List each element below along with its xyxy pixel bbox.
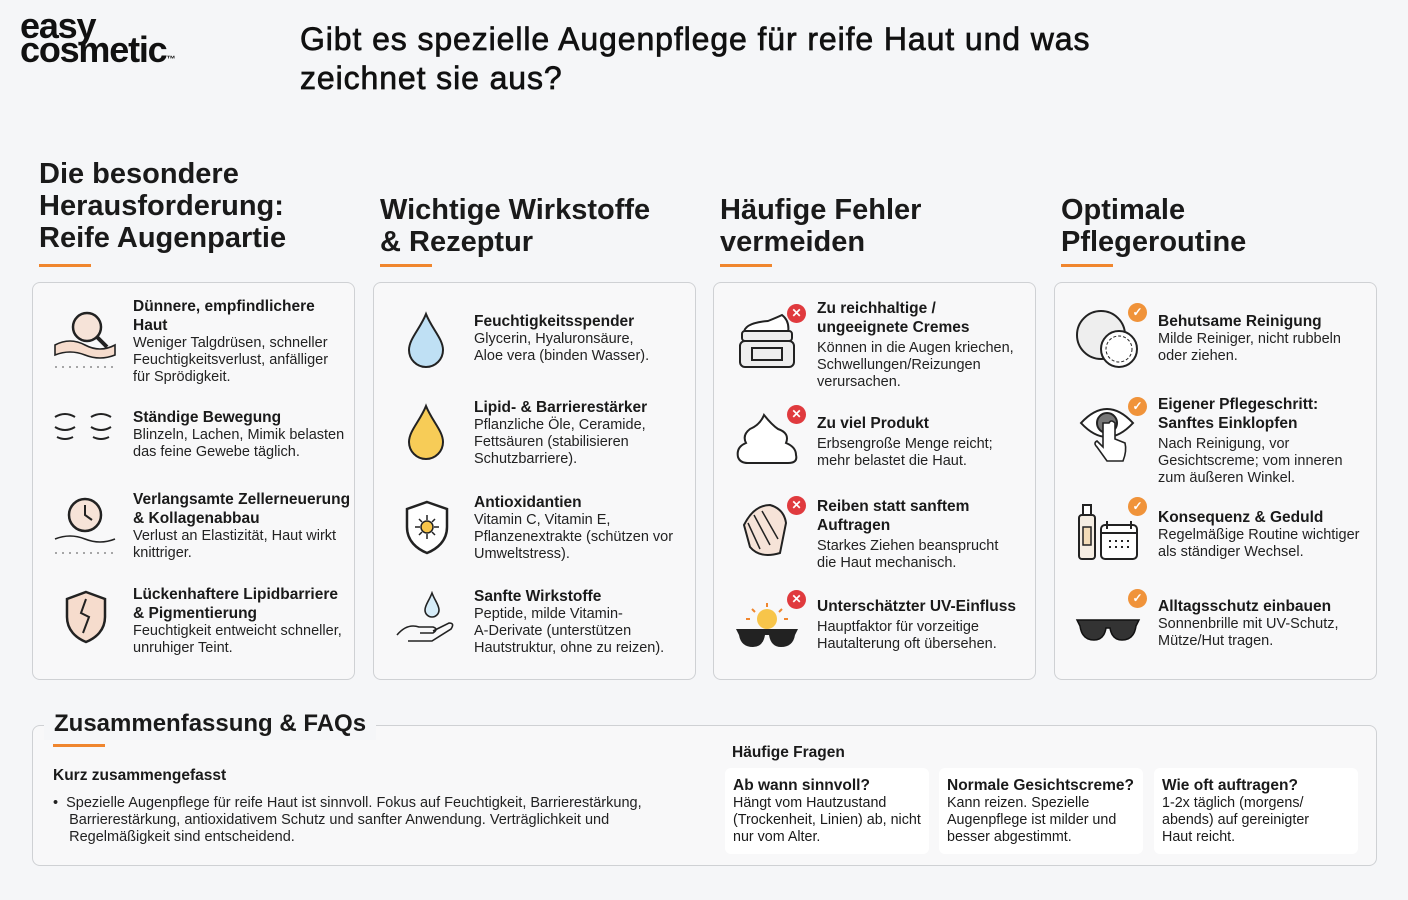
panel: challenge <box>32 282 355 680</box>
faq card: besser abgestimmt. <box>947 829 1072 845</box>
faq card: Wie oft auftragen? <box>1162 777 1298 794</box>
item: oder ziehen. <box>1158 348 1238 364</box>
item: Gesichtscreme; vom inneren <box>1158 453 1343 469</box>
icon: clock skin <box>54 498 116 554</box>
logo: cosmetic™ <box>20 29 175 70</box>
item <box>817 415 993 469</box>
item: Antioxidantien <box>474 494 582 511</box>
heading col3 <box>720 194 921 258</box>
item: Feuchtigkeit entweicht schneller, <box>133 623 342 639</box>
faq card <box>939 768 1143 854</box>
faq card: Augenpflege ist milder und <box>947 812 1116 828</box>
faq card: Haut reicht. <box>1162 829 1235 845</box>
heading col1: Reife Augenpartie <box>39 222 286 254</box>
item: Reiben statt sanftem <box>817 498 969 515</box>
item: Behutsame Reinigung <box>1158 313 1322 330</box>
item <box>1158 313 1341 364</box>
item: Hautalterung oft übersehen. <box>817 636 997 652</box>
item: Verlangsamte Zellerneuerung <box>133 491 350 508</box>
heading col3: vermeiden <box>720 226 865 258</box>
item: zum äußeren Winkel. <box>1158 470 1295 486</box>
panel: routine: ✓ <box>1132 399 1143 413</box>
faq card: Hängt vom Hautzustand <box>733 795 886 811</box>
icon: eyes <box>54 413 112 440</box>
logo <box>20 5 175 70</box>
item: Konsequenz & Geduld <box>1158 509 1323 526</box>
heading col4: Pflegeroutine <box>1061 226 1246 258</box>
item: Sonnenbrille mit UV-Schutz, <box>1158 616 1339 632</box>
item: Haut <box>133 317 167 334</box>
heading col2: & Rezeptur <box>380 226 533 258</box>
heading col4 <box>1061 194 1246 258</box>
item: Schutzbarriere). <box>474 451 577 467</box>
item: verursachen. <box>817 374 901 390</box>
panel: mistakes: ✕ <box>791 498 802 512</box>
summary text <box>53 767 642 845</box>
item: Eigener Pflegeschritt: <box>1158 396 1318 413</box>
faq card <box>1154 768 1358 854</box>
item: Feuchtigkeitsverlust, anfälliger <box>133 352 328 368</box>
title: Gibt es spezielle Augenpflege für reife Haut und was <box>300 21 1090 57</box>
item: Lückenhaftere Lipidbarriere <box>133 586 338 603</box>
item: Milde Reiniger, nicht rubbeln <box>1158 331 1341 347</box>
item: Weniger Talgdrüsen, schneller <box>133 335 328 351</box>
item <box>817 300 1014 390</box>
heading col4: Optimale <box>1061 194 1185 226</box>
item: Blinzeln, Lachen, Mimik belasten <box>133 427 344 443</box>
item <box>474 313 649 364</box>
logo: easy <box>20 5 95 46</box>
item: Dünnere, empfindlichere <box>133 298 315 315</box>
panel: mistakes <box>713 282 1036 680</box>
item: Zu reichhaltige / <box>817 300 936 317</box>
panel: mistakes: ✕ <box>791 407 802 421</box>
heading col2 <box>380 194 650 258</box>
item: Sanftes Einklopfen <box>1158 415 1298 432</box>
icon: shield <box>406 500 448 554</box>
item: A-Derivate (unterstützen <box>474 623 631 639</box>
icon: skin magnifier <box>54 312 116 368</box>
summary text: Kurz zusammengefasst <box>53 767 226 784</box>
item: Unterschätzter UV-Einfluss <box>817 598 1016 615</box>
icon: rubbing hands <box>742 504 787 556</box>
item: Pflanzenextrakte (schützen vor <box>474 529 673 545</box>
item: mehr belastet die Haut. <box>817 453 967 469</box>
item <box>133 409 344 460</box>
item: & Kollagenabbau <box>133 510 260 527</box>
item: unruhiger Teint. <box>133 640 233 656</box>
summary heading: Zusammenfassung & FAQs <box>54 710 366 737</box>
item: Verlust an Elastizität, Haut wirkt <box>133 528 336 544</box>
item <box>133 586 342 656</box>
item: Erbsengroße Menge reicht; <box>817 436 993 452</box>
faq card <box>725 768 929 854</box>
item: Zu viel Produkt <box>817 415 929 432</box>
faq card: (Trockenheit, Linien) ab, nicht <box>733 812 921 828</box>
heading col3: Häufige Fehler <box>720 194 921 226</box>
heading col1 <box>39 158 286 254</box>
item <box>474 399 647 467</box>
item: Peptide, milde Vitamin- <box>474 606 623 622</box>
icon: sunglasses <box>1076 619 1140 641</box>
panel: routine <box>1054 282 1377 680</box>
item: das feine Gewebe täglich. <box>133 444 300 460</box>
heading col1: Die besondere <box>39 158 239 190</box>
item: Nach Reinigung, vor <box>1158 436 1289 452</box>
summary text: • Spezielle Augenpflege für reife Haut ist sinnvoll. Fokus auf Feuchtigkeit, Barrierestärkung, <box>53 795 642 811</box>
item: Können in die Augen kriechen, <box>817 340 1014 356</box>
item <box>1158 598 1339 649</box>
icon: hand with drop <box>396 591 454 642</box>
item: Sanfte Wirkstoffe <box>474 588 601 605</box>
item <box>817 498 998 571</box>
faq heading: Häufige Fragen <box>732 744 845 761</box>
icon: cotton pads <box>1076 310 1138 368</box>
item: Aloe vera (binden Wasser). <box>474 348 649 364</box>
icon: cracked shield <box>66 590 106 644</box>
item: Auftragen <box>817 517 890 534</box>
heading col1: Herausforderung: <box>39 190 284 222</box>
item: Ständige Bewegung <box>133 409 281 426</box>
icon: cream swirl <box>736 413 798 464</box>
summary text: Regelmäßigkeit sind entscheidend. <box>69 829 295 845</box>
item <box>474 494 673 562</box>
item <box>133 298 328 385</box>
faq card: abends) auf gereinigter <box>1162 812 1309 828</box>
icon: sun sunglasses <box>736 603 798 647</box>
item: Schwellungen/Reizungen <box>817 357 981 373</box>
item: Lipid- & Barrierestärker <box>474 399 647 416</box>
panel: summary & FAQs <box>32 725 1377 866</box>
panel: routine: ✓ <box>1132 305 1143 319</box>
faq card: Normale Gesichtscreme? <box>947 777 1134 794</box>
faq card: 1-2x täglich (morgens/ <box>1162 795 1303 811</box>
panel: routine: ✓ <box>1132 499 1143 513</box>
item: Fettsäuren (stabilisieren <box>474 434 629 450</box>
item <box>474 588 664 656</box>
heading col2: Wichtige Wirkstoffe <box>380 194 650 226</box>
item: & Pigmentierung <box>133 605 257 622</box>
title: zeichnet sie aus? <box>300 60 563 96</box>
item: Feuchtigkeitsspender <box>474 313 634 330</box>
item: Pflanzliche Öle, Ceramide, <box>474 417 646 433</box>
icon: cream jar <box>739 314 795 368</box>
panel: mistakes: ✕ <box>791 592 802 606</box>
item: Regelmäßige Routine wichtiger <box>1158 527 1360 543</box>
item: knittriger. <box>133 545 192 561</box>
item: Mütze/Hut tragen. <box>1158 633 1273 649</box>
panel: routine: ✓ <box>1132 591 1143 605</box>
panel: ingredients <box>373 282 696 680</box>
icon: yellow drop <box>408 403 444 460</box>
item: Starkes Ziehen beansprucht <box>817 538 998 554</box>
item: ungeeignete Cremes <box>817 319 969 336</box>
item: für Sprödigkeit. <box>133 369 231 385</box>
item <box>1158 509 1360 560</box>
item: Vitamin C, Vitamin E, <box>474 512 610 528</box>
title <box>300 21 1090 96</box>
item: Hauptfaktor für vorzeitige <box>817 619 979 635</box>
faq card: Ab wann sinnvoll? <box>733 777 870 794</box>
item: Hautstruktur, ohne zu reizen). <box>474 640 664 656</box>
icon: bottle calendar <box>1078 504 1138 560</box>
item: als ständiger Wechsel. <box>1158 544 1304 560</box>
item <box>133 491 350 561</box>
item <box>817 598 1016 652</box>
summary text: Barrierestärkung, antioxidativem Schutz und sanfter Anwendung. Verträglichkeit und <box>69 812 609 828</box>
faq card: nur vom Alter. <box>733 829 820 845</box>
item: Umweltstress). <box>474 546 570 562</box>
item <box>1158 396 1343 486</box>
panel: mistakes: ✕ <box>791 306 802 320</box>
item: die Haut mechanisch. <box>817 555 956 571</box>
faq card: Kann reizen. Spezielle <box>947 795 1089 811</box>
item: Glycerin, Hyaluronsäure, <box>474 331 634 347</box>
item: Alltagsschutz einbauen <box>1158 598 1331 615</box>
icon: eye tap <box>1080 408 1134 462</box>
icon: blue drop <box>408 311 444 368</box>
